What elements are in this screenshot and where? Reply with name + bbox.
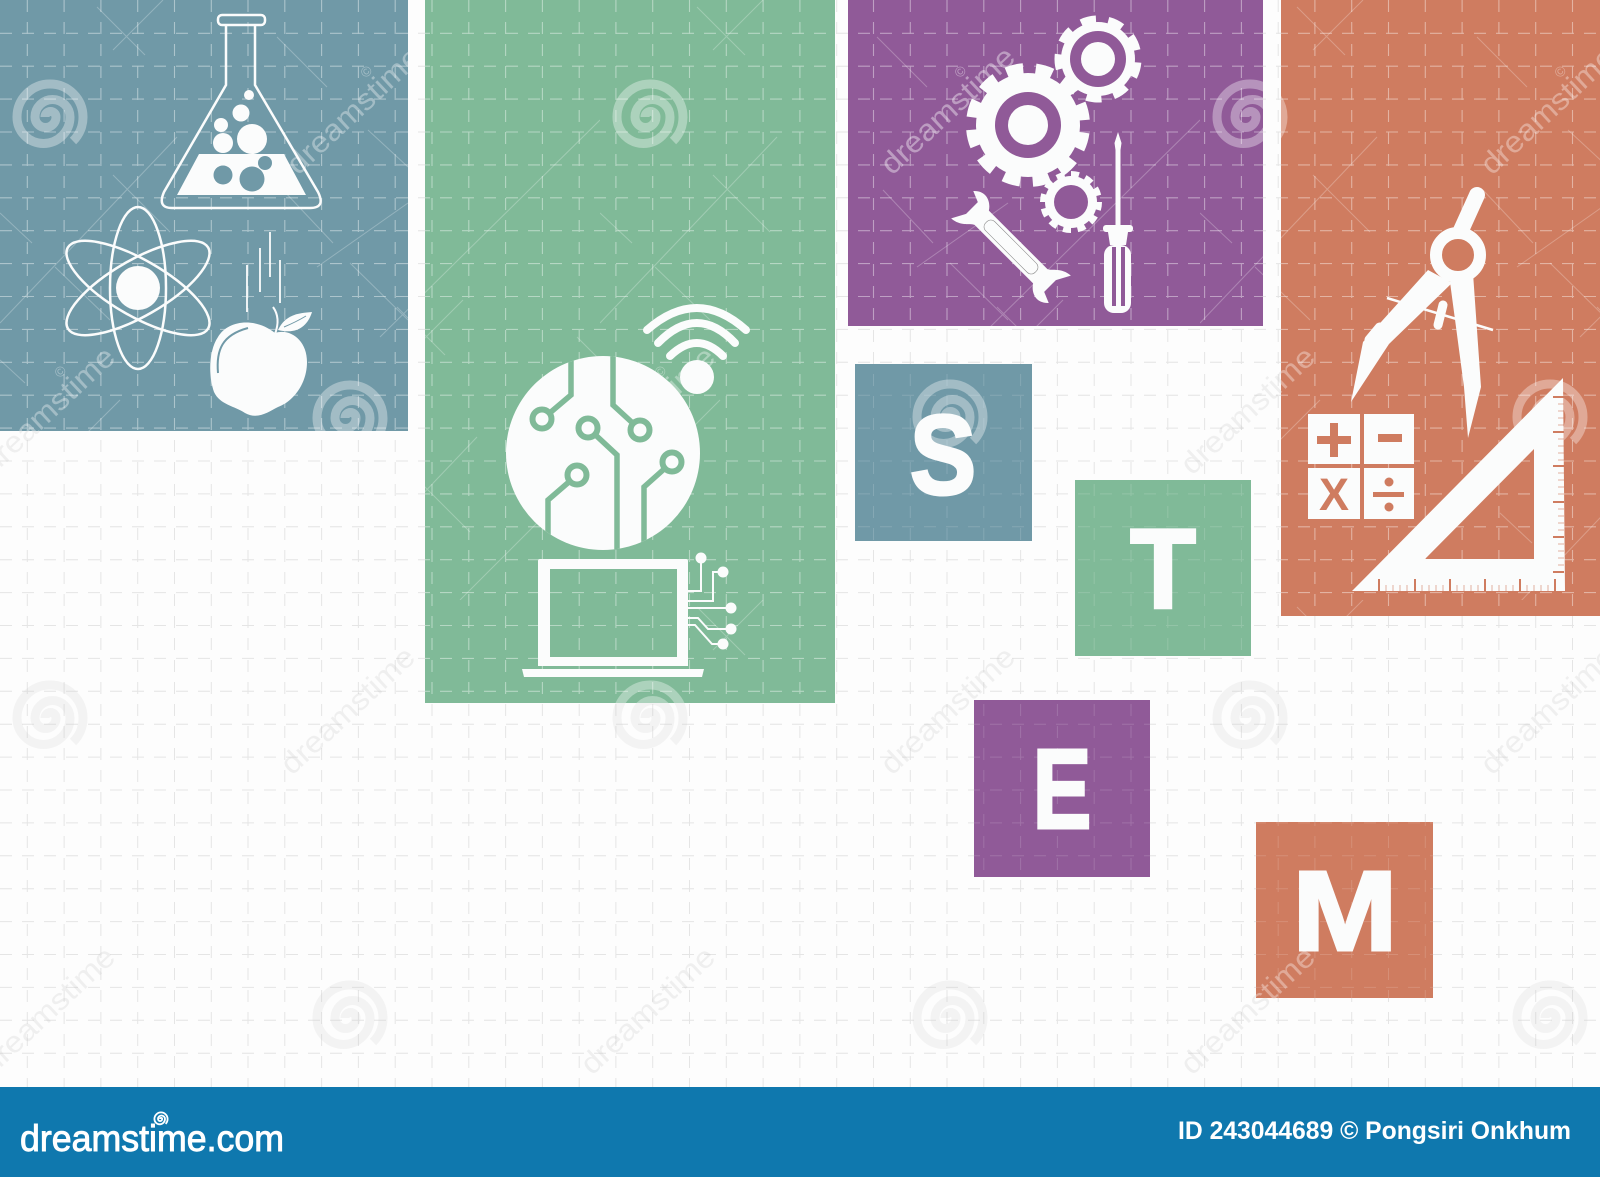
icon: calculator keys: X [1319,469,1349,520]
icon: compass [1351,195,1493,438]
panel: science: © [51,362,70,381]
panel: mathematics [1281,0,1600,616]
letter tile: S: S [910,392,976,518]
panel: engineering: © [951,62,970,81]
icon: calculator keys [1308,414,1414,520]
background dashed grid and watermark: dreamstime [874,640,1022,781]
icon: set square ruler [1352,378,1565,591]
panel: technology: dreamstime [574,340,722,481]
icon: flask [162,15,321,208]
letter tile: T: T [1130,506,1196,633]
background dashed grid and watermark: dreamstime [574,940,722,1081]
panel: mathematics: © [1551,62,1570,81]
letter tile: E: E [1033,727,1091,853]
footer bar [0,1087,1600,1177]
background dashed grid and watermark: dreamstime [1174,340,1322,481]
icon: falling apple [210,232,312,416]
icon: wrench [949,185,1073,309]
icon: upper gear [1055,16,1141,102]
letter tile: S [855,364,1032,541]
letter tile: M: dreamstime [1174,940,1322,1081]
icon: circuit globe [506,345,700,560]
letter tile: E [974,700,1150,877]
image credit: ID 243044689 © Pongsiri Onkhum [1178,1117,1571,1145]
icon: large gear [965,62,1091,188]
icon: screwdriver [1103,132,1133,313]
letter tile: T [1075,480,1251,656]
letter tile: M: M [1292,848,1398,974]
background dashed grid and watermark: dreamstime [1174,940,1322,1081]
panel: engineering: dreamstime [874,40,1022,181]
panel: science: dreamstime [280,40,428,181]
icon: atom [54,207,222,369]
icon: laptop with circuit [522,552,736,677]
panel: technology: © [651,362,670,381]
icon: small gear [1043,174,1099,230]
letter tile: M [1256,822,1433,998]
panel: engineering [848,0,1263,326]
panel: science [0,0,408,431]
panel: mathematics: dreamstime [1174,340,1322,481]
panel: science: © [357,62,376,81]
background dashed grid and watermark: dreamstime [274,640,422,781]
footer logo: dreamstime.com [20,1118,284,1159]
icon: wifi signal [647,308,746,394]
panel: technology [425,0,835,703]
